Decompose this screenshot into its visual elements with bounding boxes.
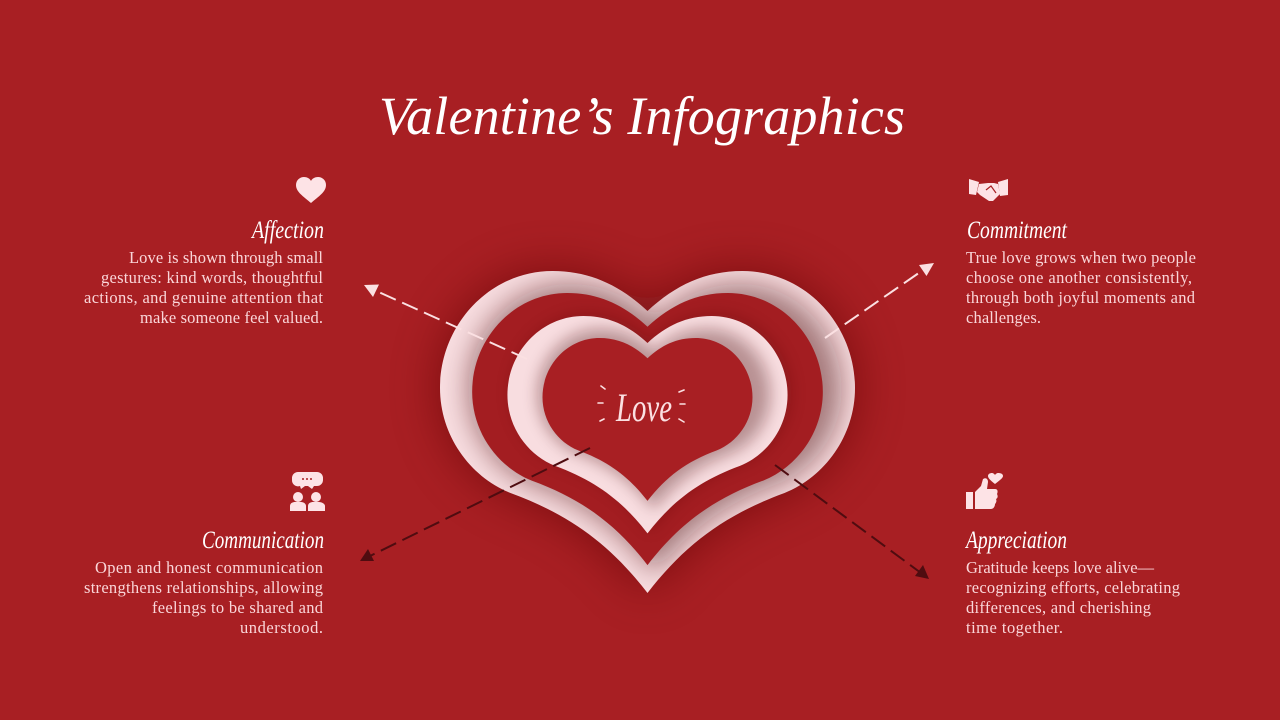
text: Communication body: strengthens relationships, allowing: [84, 578, 323, 597]
red middle band: [472, 293, 823, 565]
arrow: to Commitment: [825, 263, 934, 338]
panel: Affection: [84, 177, 326, 327]
text: Commitment body: through both joyful moments and: [966, 288, 1196, 307]
text: Commitment body: challenges.: [966, 308, 1041, 327]
panel: Appreciation: [964, 473, 1180, 637]
text: Affection body: Love is shown through small: [129, 248, 323, 267]
inner red heart: [543, 338, 752, 501]
text: Communication body: understood.: [240, 618, 323, 637]
heading: Commitment: Commitment: [967, 217, 1068, 244]
text: Appreciation body: Gratitude keeps love alive—: [966, 558, 1154, 577]
text: Appreciation body: time together.: [966, 618, 1063, 637]
heading: Communication: Communication: [202, 527, 324, 554]
arrow: to Appreciation: [775, 465, 929, 579]
icon: handshake: [969, 179, 1008, 201]
text: Communication body: Open and honest communication: [95, 558, 323, 577]
text: Affection body: actions, and genuine attention that: [84, 288, 323, 307]
layered heart: [440, 271, 855, 593]
panel: Commitment: [966, 179, 1196, 327]
arrow: to Affection: [364, 284, 527, 359]
text: Commitment body: choose one another consistently,: [966, 268, 1192, 287]
text: Appreciation body: recognizing efforts, celebrating: [966, 578, 1180, 597]
icon: thumbs up with heart: [966, 473, 1003, 509]
text: Communication body: [84, 558, 324, 637]
text: Communication body: feelings to be shared and: [152, 598, 324, 617]
text: Affection body: gestures: kind words, thoughtful: [101, 268, 323, 287]
text: Appreciation body: [966, 558, 1180, 637]
center label: Love: Love: [615, 385, 672, 430]
middle band shading: [511, 314, 791, 531]
text: Appreciation body: differences, and cherishing: [966, 598, 1151, 617]
text: Commitment body: [966, 248, 1196, 327]
panel: Communication: [84, 472, 325, 637]
title: Valentine’s Infographics: [379, 86, 905, 146]
outer pink heart: [440, 271, 855, 593]
text: Affection body: [84, 248, 323, 327]
arrow: to Communication: [360, 448, 590, 561]
heading: Appreciation: Appreciation: [964, 527, 1067, 554]
icon: heart: [296, 177, 326, 203]
heart glow shadow: [440, 271, 855, 593]
icon: people talking: [290, 472, 325, 511]
heading: Affection: Affection: [250, 217, 324, 244]
outer ring shading: [468, 284, 842, 574]
middle pink heart: [507, 316, 788, 533]
text: Commitment body: True love grows when two people: [966, 248, 1196, 267]
middle ring shading: [538, 329, 770, 509]
text: Affection body: make someone feel valued.: [140, 308, 323, 327]
